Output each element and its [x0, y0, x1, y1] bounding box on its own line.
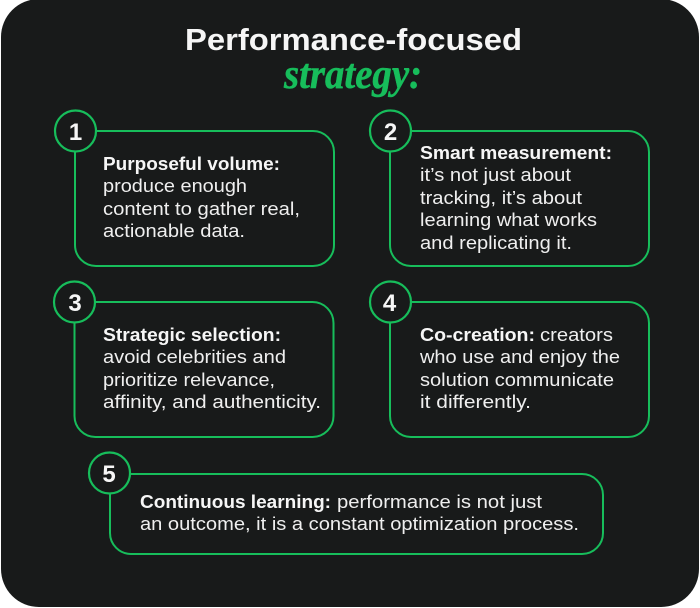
text: purposeful volume: content to gather real, [103, 199, 300, 219]
text: purposeful volume: actionable data. [103, 221, 245, 241]
text: smart measurement: Smart measurement: [420, 143, 612, 163]
text: smart measurement: learning what works [420, 210, 597, 230]
badge: 5 [89, 452, 130, 494]
badge: 4 [370, 282, 411, 322]
text: purposeful volume [103, 154, 300, 241]
text: continuous learning: performance is not just [337, 492, 542, 512]
panel: 5 continuous learning [89, 452, 603, 554]
text: continuous learning [140, 492, 579, 534]
badge: 3: 3 [68, 290, 82, 317]
text: co-creation: Co-creation: [420, 325, 535, 345]
text: co-creation: who use and enjoy the [419, 347, 620, 367]
text: co-creation: creators [540, 325, 613, 345]
text: smart measurement: tracking, it’s about [420, 188, 582, 208]
panel: 4 co-creation [370, 282, 649, 437]
text: purposeful volume: produce enough [103, 176, 247, 196]
badge: 2: 2 [384, 119, 397, 146]
panel: 3 strategic selection [54, 282, 334, 437]
title [185, 23, 522, 98]
badge: 2 [370, 110, 411, 152]
text: strategic selection: prioritize relevance, [103, 370, 275, 390]
text: strategic selection: avoid celebrities and [103, 347, 286, 367]
text: smart measurement [420, 143, 612, 253]
text: strategic selection: affinity, and authenticity. [103, 392, 321, 412]
badge: 4: 4 [383, 290, 397, 317]
text: co-creation [419, 325, 620, 412]
badge: 1 [55, 110, 96, 152]
text: co-creation: solution communicate [420, 370, 614, 390]
title: Performance-focused [185, 23, 522, 57]
title: strategy: [283, 52, 422, 98]
text: strategic selection: Strategic selection: [103, 325, 281, 345]
badge: 5: 5 [102, 461, 116, 488]
text: continuous learning: an outcome, it is a constant optimization process. [140, 514, 579, 534]
text: continuous learning: Continuous learning: [140, 492, 331, 512]
text: smart measurement: it’s not just about [420, 165, 571, 185]
text: co-creation: it differently. [420, 392, 531, 412]
panel: 1 purposeful volume [55, 110, 334, 266]
text: smart measurement: and replicating it. [420, 233, 572, 253]
panel: 2 smart measurement [370, 110, 649, 266]
badge: 1: 1 [69, 119, 82, 146]
text: strategic selection [103, 325, 321, 412]
badge: 3 [54, 282, 95, 322]
text: purposeful volume: Purposeful volume: [103, 154, 280, 174]
